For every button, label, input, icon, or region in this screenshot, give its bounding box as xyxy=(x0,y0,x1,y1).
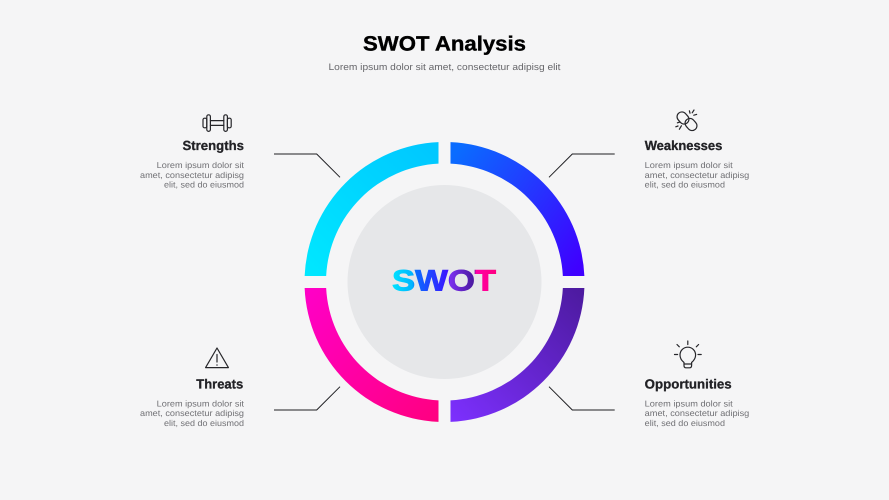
title: SWOT Analysis xyxy=(363,32,526,56)
body: weaknesses: amet, consectetur adipisg xyxy=(645,170,750,180)
body: opportunities: elit, sed do eiusmod xyxy=(645,418,725,428)
body: threats xyxy=(140,398,245,428)
weaknesses text xyxy=(645,138,750,190)
segment: threats xyxy=(305,288,438,422)
threats text xyxy=(140,376,245,428)
opportunities text xyxy=(645,376,750,428)
body: weaknesses: Lorem ipsum dolor sit xyxy=(645,160,733,170)
body: opportunities: amet, consectetur adipisg xyxy=(645,408,750,418)
segment: opportunities xyxy=(450,288,584,422)
segment: strengths xyxy=(305,142,438,276)
body: opportunities: Lorem ipsum dolor sit xyxy=(645,398,733,408)
body: threats: elit, sed do eiusmod xyxy=(164,418,244,428)
icon: warning triangle xyxy=(206,348,228,368)
subtitle: Lorem ipsum dolor sit amet, consectetur adipisg elit xyxy=(328,61,561,72)
heading: opportunities: Opportunities xyxy=(645,376,732,391)
body: strengths xyxy=(140,160,245,190)
heading: strengths: Strengths xyxy=(182,138,244,153)
segment: weaknesses xyxy=(450,142,584,276)
strengths text xyxy=(140,138,245,190)
icon: light bulb xyxy=(674,341,701,368)
connector: strengths xyxy=(274,154,340,177)
body: threats: Lorem ipsum dolor sit xyxy=(157,398,245,408)
heading: weaknesses: Weaknesses xyxy=(645,138,722,153)
body: strengths: elit, sed do eiusmod xyxy=(164,180,244,190)
heading: threats: Threats xyxy=(196,376,243,391)
body: weaknesses: elit, sed do eiusmod xyxy=(645,180,725,190)
icon: dumbbell xyxy=(203,115,231,131)
connector: threats xyxy=(274,387,340,410)
body: weaknesses xyxy=(645,160,750,190)
body: threats: amet, consectetur adipisg xyxy=(140,408,244,418)
icon: broken link xyxy=(675,110,699,133)
center SWOT label: SWOT xyxy=(392,264,496,298)
donut ring diagram xyxy=(305,142,584,422)
center circle xyxy=(348,185,542,379)
body: strengths: amet, consectetur adipisg xyxy=(140,170,244,180)
connector: opportunities xyxy=(549,387,615,410)
body: strengths: Lorem ipsum dolor sit xyxy=(157,160,245,170)
body: opportunities xyxy=(645,398,750,428)
connector: weaknesses xyxy=(549,154,615,177)
